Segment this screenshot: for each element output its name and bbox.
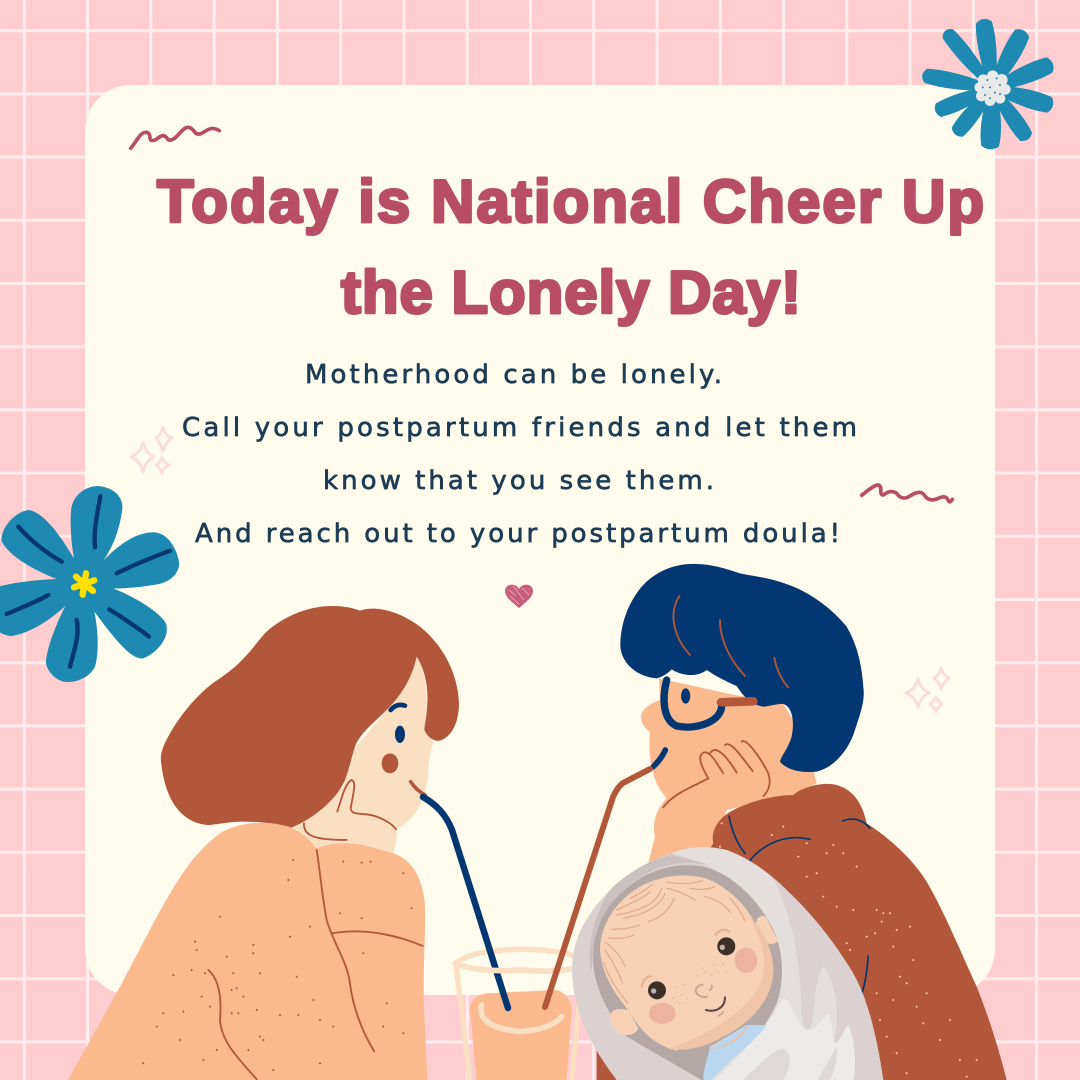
- woman hand and sweater lines: [208, 780, 423, 1079]
- baby face shadow: [670, 917, 773, 1050]
- text block: message: know that you see them.: [323, 466, 714, 496]
- blanket lower shadow folds: [743, 1047, 837, 1080]
- baby wrapped in blanket: [572, 847, 883, 1080]
- blanket base: [572, 847, 883, 1080]
- baby ear top: [756, 916, 778, 944]
- text block: message: Call your postpartum friends and let them: [182, 413, 857, 443]
- baby face: [600, 876, 771, 1051]
- text block: message: And reach out to your postpartum doula!: [195, 519, 840, 549]
- man hair: [620, 564, 864, 772]
- baby neck: [710, 1024, 748, 1050]
- baby brows: [642, 930, 729, 987]
- man face and arm: [641, 678, 817, 863]
- woman eye, brow, cheek, mouth: [382, 705, 425, 795]
- title: the Lonely Day!: [341, 259, 801, 326]
- glass front rim: [455, 963, 577, 971]
- baby hair lines: [603, 881, 745, 1003]
- icon: sparkles left: [131, 427, 172, 473]
- blanket light fold: [672, 847, 837, 1080]
- baby ear left: [610, 1009, 638, 1035]
- man sweater: [597, 784, 1007, 1080]
- woman hair: [161, 606, 459, 828]
- icon: squiggle top left: [131, 127, 219, 148]
- man: [597, 564, 1007, 1080]
- woman sweater: [68, 823, 427, 1080]
- text block: message: [182, 360, 857, 549]
- woman sweater speckles: [143, 860, 412, 1070]
- woman: [68, 606, 459, 1080]
- icon: squiggle right: [862, 485, 952, 502]
- glass walls and back rim: [455, 949, 579, 1080]
- drink liquid: [470, 990, 572, 1080]
- straw: man: [545, 769, 650, 1007]
- title: [157, 168, 984, 326]
- baby nose and mouth: [696, 985, 725, 1016]
- man sweater speckles: [720, 823, 977, 1077]
- woman face and hand: [293, 657, 433, 853]
- baby shirt: [703, 1025, 767, 1080]
- icon: flower top right: [921, 18, 1056, 150]
- baby freckles: [673, 964, 727, 1003]
- hood top band: [590, 855, 723, 973]
- baby cheeks: [649, 948, 757, 1024]
- glass with drink: [455, 949, 579, 1080]
- baby eyes: [648, 937, 735, 999]
- panel: cream card: [85, 85, 995, 995]
- straw: woman: [423, 797, 508, 1008]
- icon: flower left: [0, 486, 179, 682]
- icon: sparkles right: [906, 668, 949, 712]
- icon: heart: [505, 585, 533, 608]
- man sweater lines: [729, 816, 870, 998]
- hood inner: [593, 865, 782, 1080]
- blanket white fold: [715, 998, 855, 1080]
- man hair and hand lines: [663, 596, 788, 807]
- text block: message: Motherhood can be lonely.: [305, 360, 722, 390]
- man glasses, eye, straw tip: [653, 680, 753, 767]
- drink highlight: [481, 1005, 562, 1032]
- title: Today is National Cheer Up: [157, 168, 984, 235]
